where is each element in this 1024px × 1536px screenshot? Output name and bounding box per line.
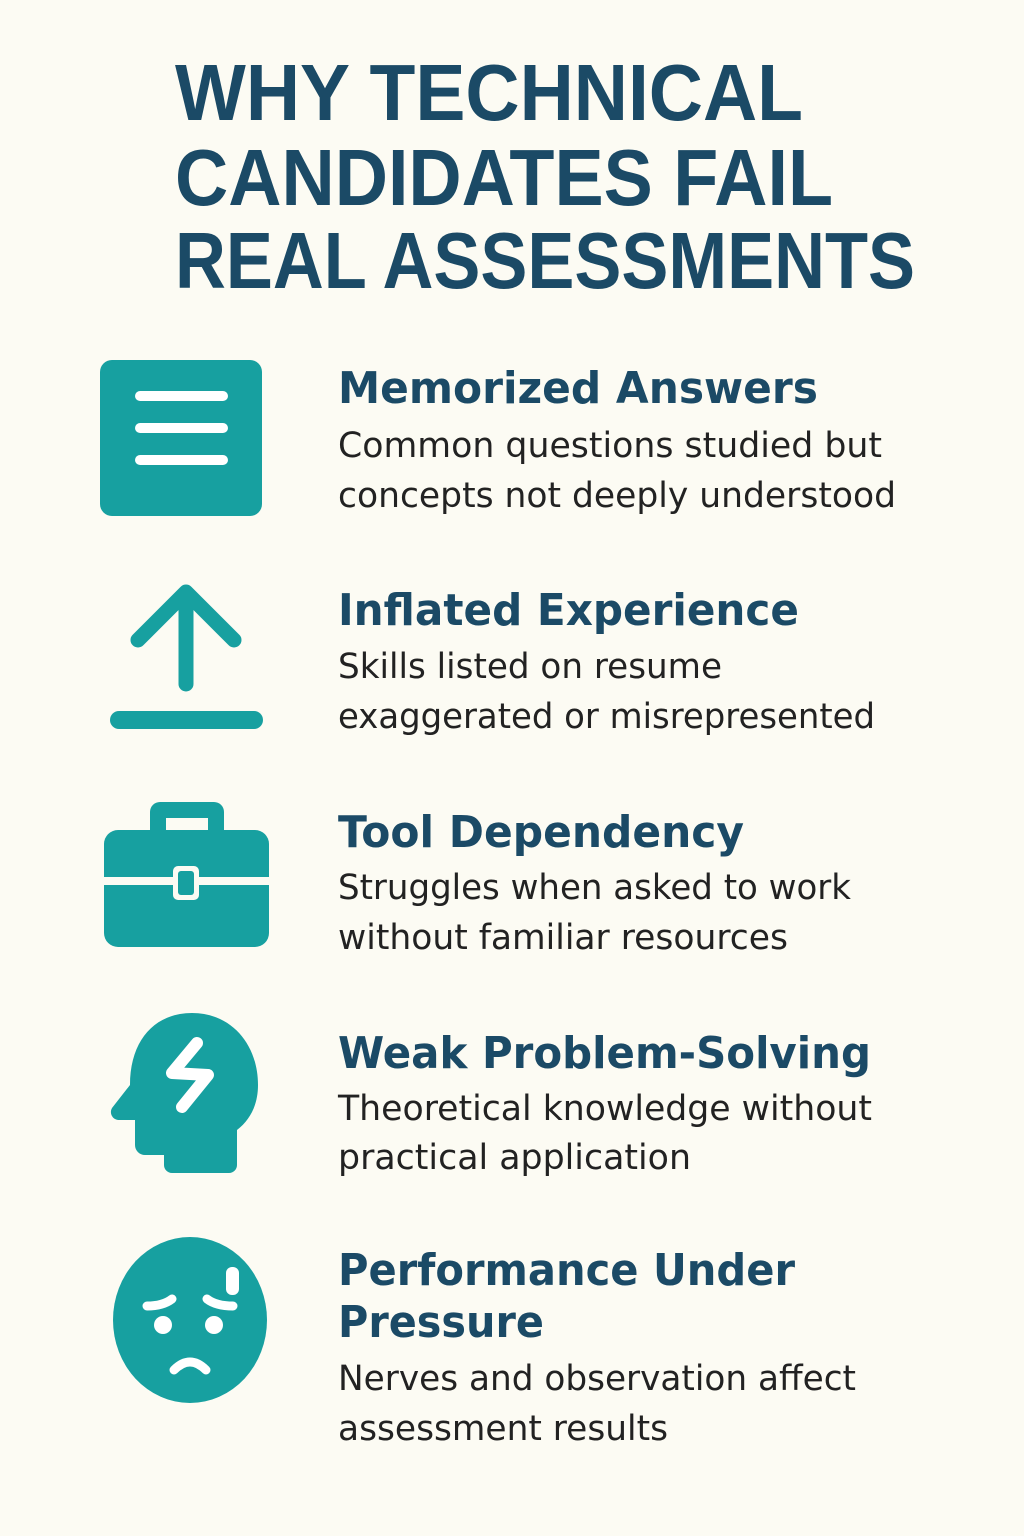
item: performance under pressure: assessment results — [338, 1409, 668, 1449]
icon: head with lightning — [111, 1013, 258, 1173]
item: performance under pressure: Pressure — [338, 1297, 544, 1348]
item: inflated experience: Inflated Experience — [338, 585, 799, 636]
item: performance under pressure: Performance Under — [338, 1245, 795, 1296]
item: weak problem-solving: practical application — [338, 1138, 691, 1178]
icon: document — [100, 360, 262, 516]
icon: upload arrow — [119, 592, 254, 720]
item: memorized answers: Memorized Answers — [338, 363, 818, 414]
item: memorized answers — [338, 363, 896, 516]
item: weak problem-solving: Theoretical knowledge without — [337, 1089, 872, 1129]
item: tool dependency: Tool Dependency — [338, 807, 744, 858]
icon: stressed face — [113, 1237, 267, 1403]
title — [175, 48, 915, 305]
item: tool dependency: Struggles when asked to work — [338, 868, 852, 908]
title: WHY TECHNICAL — [175, 48, 803, 137]
item: tool dependency — [338, 807, 852, 958]
item: tool dependency: without familiar resources — [338, 918, 788, 958]
icon: briefcase — [104, 802, 269, 947]
item: inflated experience: exaggerated or misrepresented — [338, 697, 875, 737]
item: memorized answers: concepts not deeply understood — [338, 476, 896, 516]
item: memorized answers: Common questions studied but — [338, 426, 882, 466]
title: CANDIDATES FAIL — [175, 133, 833, 222]
item: weak problem-solving: Weak Problem-Solving — [338, 1028, 871, 1079]
item: inflated experience: Skills listed on resume — [338, 647, 722, 687]
item: performance under pressure — [338, 1245, 856, 1449]
item: performance under pressure: Nerves and observation affect — [338, 1359, 856, 1399]
item: inflated experience — [338, 585, 875, 737]
title: REAL ASSESSMENTS — [175, 216, 915, 305]
item: weak problem-solving — [337, 1028, 872, 1178]
